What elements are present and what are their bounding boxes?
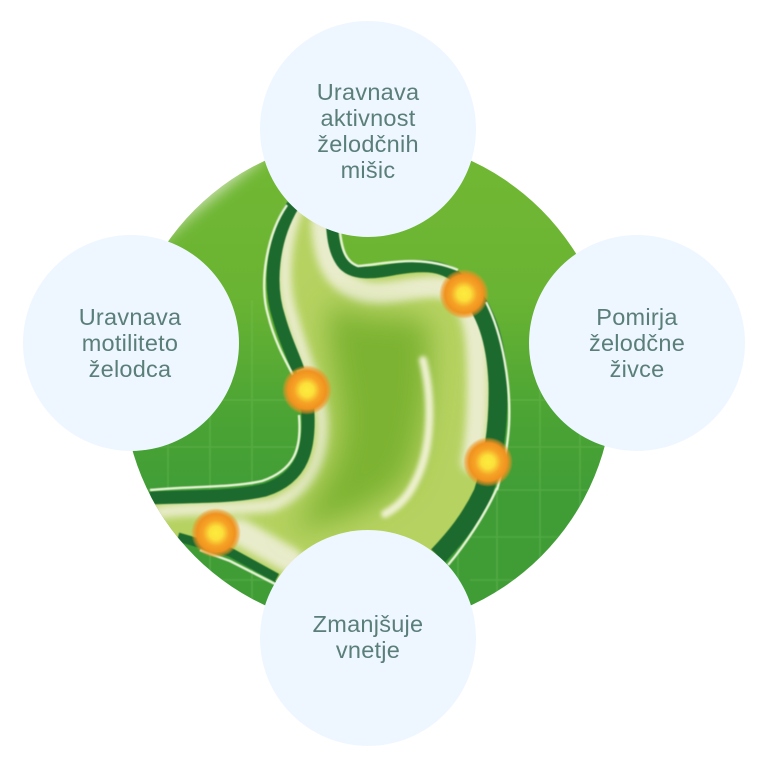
circle: bottom (260, 530, 476, 746)
pale inner lining (160, 205, 478, 560)
circle: right: želodčne (589, 330, 685, 356)
faded white corner (168, 161, 267, 244)
circle: top: aktivnost (320, 105, 416, 131)
circle: bottom: Zmanjšuje (313, 611, 423, 637)
circle: top (260, 21, 476, 237)
circle: top: mišic (341, 157, 395, 183)
inflammation spot: bottom right (463, 437, 513, 487)
inflammation spot: left (282, 365, 332, 415)
white wall highlight (150, 205, 509, 585)
green background (132, 160, 605, 606)
background grid (148, 300, 604, 599)
inner highlight crescent (385, 360, 429, 514)
stomach body (140, 207, 500, 582)
stomach illustration disc (132, 160, 605, 606)
inflammation spot: top right (439, 269, 489, 319)
circle: left: motiliteto (82, 330, 178, 356)
circle: left: želodca (89, 356, 172, 382)
circle: left: Uravnava (79, 304, 182, 330)
circle: top: želodčnih (317, 131, 419, 157)
circle: right (529, 235, 745, 451)
green stomach core (290, 300, 429, 532)
inflammation spot: bottom left (191, 508, 241, 558)
circle: bottom: vnetje (336, 637, 400, 663)
dark stomach wall (150, 205, 498, 578)
circle: right: živce (610, 356, 664, 382)
circle: top: Uravnava (317, 79, 420, 105)
circle: left (23, 235, 239, 451)
circle: right: Pomirja (596, 304, 678, 330)
